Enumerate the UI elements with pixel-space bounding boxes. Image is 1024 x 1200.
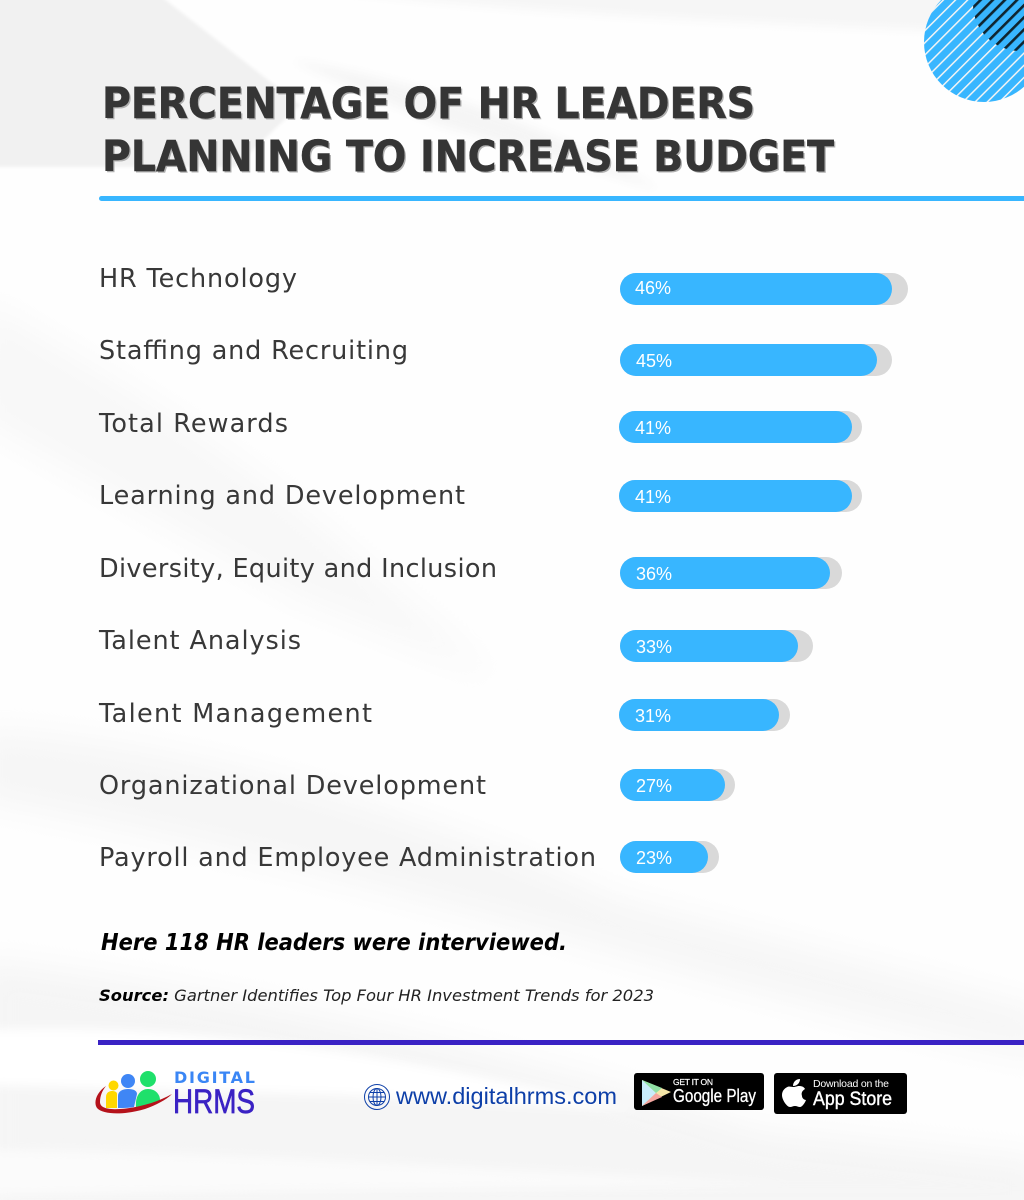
row: Learning and Development xyxy=(99,480,862,512)
row: HR Technology: 46% xyxy=(635,278,671,298)
badge: Google Play xyxy=(634,1073,764,1110)
row: Talent Management: Talent Management xyxy=(98,699,372,729)
row: Learning and Development: 41% xyxy=(635,487,671,507)
row: Diversity, Equity and Inclusion xyxy=(99,554,842,589)
row: Talent Analysis: Talent Analysis xyxy=(98,626,301,656)
icon: people and swoosh xyxy=(95,1071,172,1113)
title: PERCENTAGE OF HR LEADERS xyxy=(102,79,755,129)
row: Talent Analysis: 33% xyxy=(636,637,672,657)
icon: apple xyxy=(782,1079,806,1107)
row: Total Rewards xyxy=(98,409,862,443)
row: Staffing and Recruiting xyxy=(99,336,892,376)
row: Organizational Development: Organizational Development xyxy=(99,771,486,801)
badge: App Store: App Store xyxy=(813,1088,892,1110)
row: Total Rewards: 41% xyxy=(635,418,671,438)
logo: Digital HRMS xyxy=(95,1068,255,1121)
row: Diversity, Equity and Inclusion: Diversity, Equity and Inclusion xyxy=(99,554,497,584)
badge: Google Play: GET IT ON xyxy=(673,1077,713,1087)
source line: Source: Gartner Identifies Top Four HR Investment Trends for 2023 xyxy=(99,986,654,1005)
row: HR Technology xyxy=(99,264,908,305)
icon: globe xyxy=(364,1084,390,1110)
footer divider xyxy=(98,1040,1024,1045)
logo wordmark: DIGITAL xyxy=(174,1068,255,1087)
row: Learning and Development: Learning and Development xyxy=(99,481,465,511)
decorative hatched circle xyxy=(924,0,1024,102)
row: Diversity, Equity and Inclusion: 36% xyxy=(636,564,672,584)
title: PERCENTAGE OF HR LEADERS xyxy=(104,80,756,130)
badge: Google Play: Google Play xyxy=(673,1086,756,1106)
logo: Digital HRMS: HRMS xyxy=(173,1083,255,1121)
note: interview count: Here 118 HR leaders were interviewed. xyxy=(101,930,567,956)
badge: App Store: Download on the xyxy=(813,1078,889,1090)
title xyxy=(102,79,836,184)
row: HR Technology: HR Technology xyxy=(99,264,297,294)
row: Staffing and Recruiting: Staffing and Recruiting xyxy=(99,336,408,366)
row: Talent Analysis xyxy=(98,626,813,662)
title: PLANNING TO INCREASE BUDGET xyxy=(104,134,836,184)
row: Talent Management: 31% xyxy=(635,706,671,726)
row: Payroll and Employee Administration: Payroll and Employee Administration xyxy=(99,843,596,873)
row: Staffing and Recruiting: 45% xyxy=(636,351,672,371)
row: Organizational Development xyxy=(99,769,735,801)
website url: www.digitalhrms.com xyxy=(395,1083,617,1109)
badge: App Store xyxy=(774,1073,907,1114)
title underline xyxy=(99,196,1024,201)
row: Total Rewards: Total Rewards xyxy=(98,409,288,439)
row: Organizational Development: 27% xyxy=(636,776,672,796)
row: Talent Management xyxy=(98,699,790,731)
row: Payroll and Employee Administration: 23% xyxy=(636,848,672,868)
icon: play triangle xyxy=(642,1080,671,1106)
title: PLANNING TO INCREASE BUDGET xyxy=(102,132,835,182)
